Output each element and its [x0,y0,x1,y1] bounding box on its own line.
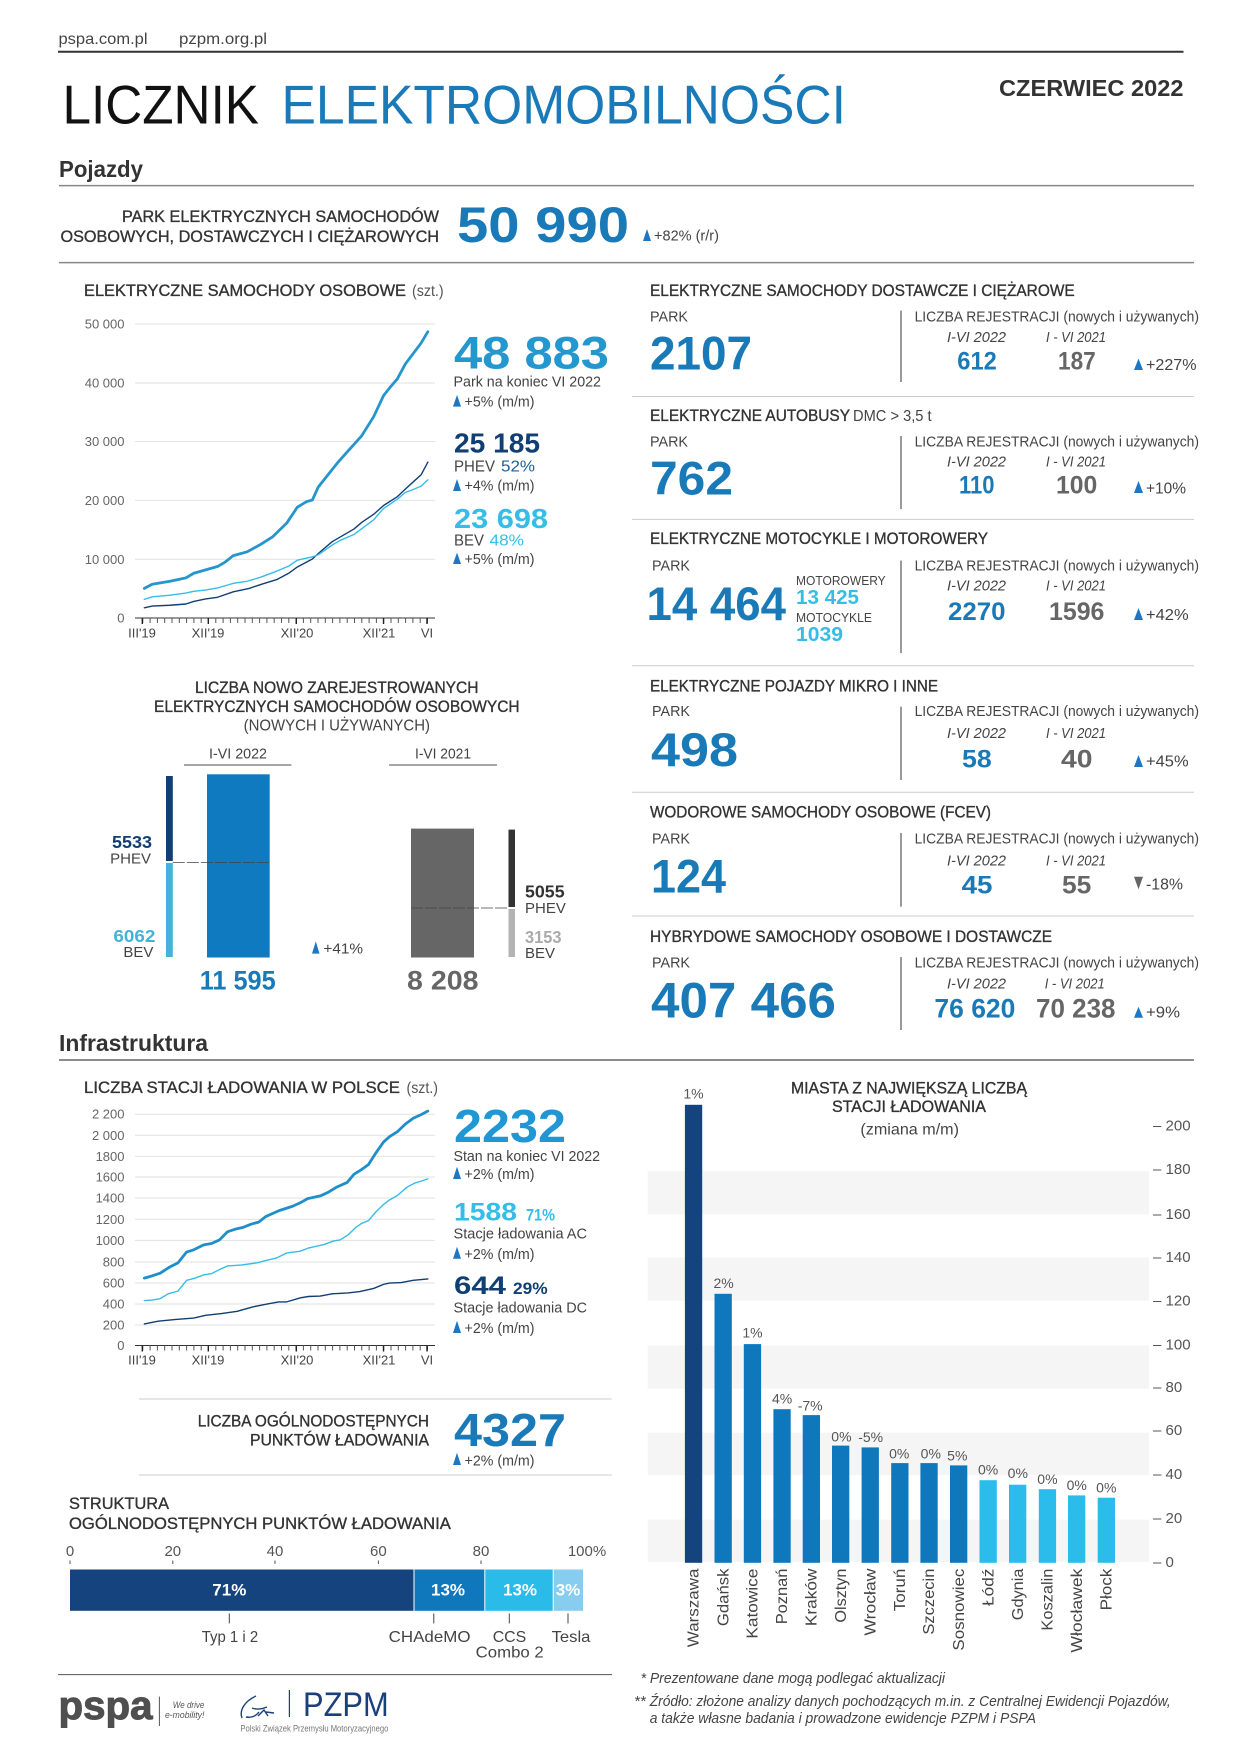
panel: hybrid cars: LICZBA REJESTRACJI (nowych i używanych) [915,954,1199,971]
bar group: I-VI 2021: 8 208 [407,965,478,995]
stacked bar: 60 [370,1543,387,1560]
title [62,73,846,135]
header links: pspa.com.pl [58,31,148,48]
panel: electric motorcycles and mopeds [646,529,1199,653]
stacked bar: Combo 2 [476,1644,544,1662]
total fleet headline: +82% (r/r) [654,228,719,245]
panel: hybrid cars [650,927,1199,1030]
line chart: stations: 1400 [96,1190,124,1206]
panel: charging points structure [66,1494,606,1662]
stacked bar: 71% [212,1581,246,1600]
total fleet headline: OSOBOWYCH, DOSTAWCZYCH I CIĘŻAROWYCH [60,227,439,246]
footnotes: a także własne badania i prowadzone ewidencje PZPM i PSPA [650,1710,1036,1727]
structure heading: STRUKTURA [69,1494,170,1513]
bar group: I-VI 2021: 5055 [525,882,565,902]
panel: vans and trucks: PARK [650,308,688,326]
bar chart: cities: – 180 [1153,1161,1191,1178]
panel: hybrid cars: PARK [652,954,690,971]
footnotes: * Prezentowane dane mogą podlegać aktualizacji [641,1670,946,1687]
line chart: stations: 2 200 [92,1107,124,1122]
stacked bar [66,1543,606,1662]
panel: micro vehicles: I-VI 2022 [947,725,1007,742]
panel: electric motorcycles and mopeds: 14 464 [646,577,786,630]
panel: electric buses: I-VI 2022 [947,453,1007,470]
line chart: stations: 400 [103,1296,124,1312]
panel: electric buses: PARK [650,434,688,450]
panel: electric buses: I - VI 2021 [1046,453,1106,470]
public charging points headline [198,1404,566,1469]
panel: micro vehicles: +45% [1146,754,1189,771]
stacked bar: 3% [556,1581,580,1600]
bar chart: cities: Toruń [892,1569,909,1611]
footnotes: Źródło: złożone analizy danych pochodzących m.in. z Centralnej Ewidencji Pojazdów, [649,1693,1171,1710]
bar chart: cities: Kraków [804,1568,820,1626]
bar chart: cities: 0% [978,1461,998,1477]
key figures: passenger cars: 25 185 [454,427,540,458]
line chart: stations: VI [421,1352,433,1367]
registrations heading: LICZBA NOWO ZAREJESTROWANYCH [195,678,478,697]
line chart: stations [92,1107,435,1367]
bar chart: cities: – 20 [1153,1510,1182,1527]
bar chart: cities: 0% [1067,1477,1087,1493]
stacked bar: 13% [431,1581,465,1600]
bar chart: cities: 0% [1008,1465,1028,1481]
registrations heading [154,678,520,735]
bar group: I-VI 2022: 5533 [112,832,152,852]
bar chart: cities: Łódź [980,1569,997,1606]
panel: hybrid cars: 407 466 [651,973,836,1029]
public charging points headline: +2% (m/m) [464,1452,534,1469]
bar chart: cities: – 200 [1153,1117,1191,1134]
bar chart: cities: – 120 [1153,1293,1191,1310]
chart heading: ELEKTRYCZNE SAMOCHODY OSOBOWE [84,281,406,300]
key figures: passenger cars: +5% (m/m) [464,394,534,411]
bar chart: cities: – 160 [1153,1206,1191,1223]
total fleet headline [60,197,719,253]
panel: electric motorcycles and mopeds: MOTOCYKLE [796,610,872,625]
panel: electric motorcycles and mopeds: +42% [1146,607,1189,624]
stacked bar: 20 [164,1543,181,1560]
panel: hydrogen cars: LICZBA REJESTRACJI (nowych i używanych) [915,830,1199,847]
line chart: stations: 200 [103,1318,124,1332]
bar chart: cities: 1% [683,1086,704,1102]
line chart: stations: XII'20 [281,1352,313,1367]
panel: hybrid cars: I - VI 2021 [1045,975,1105,992]
key figures: stations: 1588 [454,1199,517,1227]
panel: vans and trucks: 187 [1058,348,1096,376]
stacked bar: 0 [66,1543,74,1560]
key figures: stations: Stacje ładowania AC [454,1226,587,1243]
stacked bar: CHAdeMO [389,1629,470,1646]
bar chart: cities: 1% [742,1324,763,1340]
key figures: stations: +2% (m/m) [464,1166,534,1183]
panel: electric buses: LICZBA REJESTRACJI (nowych i używanych) [915,434,1199,450]
section heading: Pojazdy: Pojazdy [59,156,143,182]
cities heading: STACJI ŁADOWANIA [832,1097,987,1116]
panel: electric motorcycles and mopeds: 1039 [796,624,843,646]
bar chart: cities: Szczecin [921,1569,938,1635]
bar group: I-VI 2022 [110,746,291,995]
panel: electric buses: ELEKTRYCZNE AUTOBUSY [650,406,850,425]
panel: electric buses: 762 [650,452,733,504]
bar chart: cities: -7% [798,1398,823,1414]
date: CZERWIEC 2022 [999,75,1184,101]
cities heading [791,1079,1028,1138]
panel: electric motorcycles and mopeds: I - VI 2021 [1046,578,1106,594]
panel: hydrogen cars: -18% [1146,876,1183,893]
bar chart: cities: Koszalin [1040,1569,1057,1631]
line chart: passenger cars: 0 [117,610,124,626]
key figures: passenger cars: 52% [501,458,535,475]
cities heading: MIASTA Z NAJWIĘKSZĄ LICZBĄ [791,1079,1028,1098]
panel: hydrogen cars: PARK [652,830,690,847]
key figures: stations: +2% (m/m) [464,1320,534,1337]
panel: hydrogen cars: WODOROWE SAMOCHODY OSOBOWE (FCEV) [650,803,991,822]
bar chart: cities: Gdynia [1010,1569,1027,1620]
line chart: passenger cars: 10 000 [85,552,124,567]
panel: vans and trucks: I - VI 2021 [1046,329,1106,346]
bar group: I-VI 2021: BEV [525,945,555,962]
panel: micro vehicles: 40 [1061,745,1092,773]
bar chart: cities: 0% [921,1446,941,1462]
panel: hydrogen cars [650,803,1199,907]
panel: micro vehicles: 58 [962,745,992,773]
line chart: passenger cars: 40 000 [85,376,124,390]
panel: micro vehicles: PARK [652,703,690,720]
cities heading: (zmiana m/m) [860,1121,959,1138]
panel: charging stations line chart [84,1078,600,1367]
panel: vans and trucks: LICZBA REJESTRACJI (nowych i używanych) [915,308,1199,326]
key figures: stations: 29% [513,1279,548,1298]
logo: PSPA [58,1684,205,1728]
panel: electric buses: 100 [1056,471,1097,499]
logo: PZPM [240,1686,389,1734]
panel: electric buses: +10% [1146,480,1186,497]
key figures: stations [453,1100,600,1337]
panel: micro vehicles: I - VI 2021 [1046,725,1106,742]
bar chart: cities: Gdańsk [716,1568,733,1626]
panel: hydrogen cars: 124 [651,850,726,903]
panel: micro vehicles: LICZBA REJESTRACJI (nowych i używanych) [915,703,1199,720]
line chart: passenger cars: 50 000 [85,316,124,332]
panel: hybrid cars: I-VI 2022 [947,975,1007,992]
title: ELEKTROMOBILNOŚCI [282,73,846,135]
total fleet headline: 50 990 [457,197,629,253]
panel: vans and trucks: ELEKTRYCZNE SAMOCHODY DOSTAWCZE I CIĘŻAROWE [650,281,1075,300]
logo: PSPA: e-mobility! [165,1710,205,1720]
bar chart: cities: – 100 [1153,1337,1191,1354]
public charging points headline: 4327 [454,1404,566,1456]
line chart: passenger cars: XII'19 [192,626,224,641]
panel: passenger electric cars line chart [84,281,609,641]
panel: hydrogen cars: 55 [1062,871,1091,899]
bar group: I-VI 2022: BEV [123,944,153,961]
bar group: I-VI 2021: 3153 [525,927,562,947]
key figures: passenger cars: Park na koniec VI 2022 [454,373,601,390]
panel: vans and trucks: 612 [957,348,997,376]
key figures: passenger cars: +5% (m/m) [464,551,534,568]
stacked bar: 13% [503,1581,537,1600]
key figures: passenger cars: BEV [454,532,484,550]
bar group: I-VI 2021 [389,746,566,995]
line chart: stations: 1600 [96,1170,124,1184]
panel: electric buses: 110 [959,471,994,499]
bar chart: cities: Poznań [774,1569,791,1624]
panel: electric motorcycles and mopeds: I-VI 2022 [947,578,1007,594]
stacked bar: 80 [473,1543,489,1560]
line chart: stations: 600 [103,1276,124,1290]
bar chart: cities: -5% [858,1429,883,1445]
panel: hydrogen cars: I-VI 2022 [947,852,1007,869]
bar group: I-VI 2022: I-VI 2022 [209,746,267,763]
key figures: passenger cars: 48 883 [454,328,609,379]
chart heading: (szt.) [412,283,444,300]
bar group: I-VI 2022: 11 595 [200,965,276,995]
panel: electric buses: DMC > 3,5 t [853,408,932,425]
line chart: passenger cars: VI [421,626,433,641]
bar chart: cities: – 40 [1153,1466,1182,1483]
registrations heading: ELEKTRYCZNYCH SAMOCHODÓW OSOBOWYCH [154,697,520,716]
bar chart: cities: – 60 [1153,1422,1182,1439]
key figures: passenger cars [453,328,609,568]
key figures: passenger cars: 23 698 [454,503,548,534]
panel: hybrid cars: HYBRYDOWE SAMOCHODY OSOBOWE I DOSTAWCZE [650,927,1052,946]
bar chart: cities [648,1086,1191,1653]
total fleet headline: PARK ELEKTRYCZNYCH SAMOCHODÓW [122,207,439,226]
line chart: passenger cars [85,316,435,641]
panel: electric motorcycles and mopeds: 13 425 [796,587,859,609]
line chart: passenger cars: 20 000 [85,493,124,508]
line chart: stations: XII'21 [363,1352,395,1367]
stacked bar: CCS [493,1629,526,1646]
line chart: stations: 1200 [96,1212,124,1227]
panel: electric motorcycles and mopeds: PARK [652,557,690,574]
line chart: stations: 2 000 [92,1128,124,1143]
key figures: passenger cars: PHEV [454,458,495,475]
key figures: passenger cars: 48% [490,532,524,550]
panel: electric motorcycles and mopeds: ELEKTRYCZNE MOTOCYKLE I MOTOROWERY [650,529,988,548]
footnotes [634,1670,1171,1727]
bar chart: cities: – 140 [1153,1249,1191,1266]
panel: hybrid cars: 76 620 [934,994,1015,1024]
line chart: stations: XII'19 [192,1352,224,1367]
bar chart: cities: Płock [1098,1568,1116,1610]
bar chart: cities: 0% [1096,1479,1116,1495]
title: LICZNIK [62,73,259,135]
footnotes: ** [634,1693,647,1710]
panel: vans and trucks [650,281,1199,382]
bar chart: cities: – 0 [1153,1554,1174,1571]
bar group: I-VI 2022: PHEV [110,851,151,868]
bar group: I-VI 2021: PHEV [525,900,566,917]
key figures: stations: 644 [454,1272,506,1300]
key figures: stations: 71% [526,1206,555,1225]
line chart: passenger cars: III'19 [128,626,156,641]
bar chart: cities: Wrocław [862,1568,879,1636]
bar chart: cities: 4% [772,1390,792,1406]
bar chart: cities: Sosnowiec [951,1569,968,1651]
panel: cities bar chart [648,1079,1191,1653]
bar chart: cities: 2% [713,1275,734,1291]
bar chart: cities: – 80 [1153,1379,1182,1396]
bar chart: cities: Włocławek [1069,1568,1086,1653]
line chart: stations: III'19 [128,1352,156,1367]
bar chart: cities: Warszawa [686,1569,703,1647]
panel: electric motorcycles and mopeds: MOTOROWERY [796,573,886,588]
panel: vans and trucks: 2107 [650,326,752,380]
registrations heading: (NOWYCH I UŻYWANYCH) [244,716,430,735]
year-on-year change: +41% [323,941,363,958]
line chart: stations: 1000 [96,1233,124,1248]
panel: electric buses [650,406,1199,509]
key figures: stations: 2232 [454,1100,566,1152]
header links: pzpm.org.pl [179,31,267,48]
logo: PZPM: PZPM [303,1686,389,1724]
panel: micro vehicles: ELEKTRYCZNE POJAZDY MIKRO I INNE [650,677,938,696]
key figures: passenger cars: +4% (m/m) [464,478,534,495]
line chart: passenger cars: XII'21 [363,626,395,641]
panel: new registrations [110,678,566,995]
panel: electric motorcycles and mopeds: LICZBA REJESTRACJI (nowych i używanych) [915,557,1199,574]
panel: vans and trucks: +227% [1146,357,1196,374]
panel: hybrid cars: 70 238 [1036,994,1116,1024]
bar chart: cities: 0% [831,1429,852,1445]
bar chart: cities: 0% [889,1446,909,1462]
panel: hydrogen cars: I - VI 2021 [1046,852,1106,869]
bar group: I-VI 2022: 6062 [113,926,156,946]
stations heading: (szt.) [406,1080,438,1097]
line chart: stations: 800 [103,1254,124,1270]
bar chart: cities: Olsztyn [833,1569,850,1623]
logo: PZPM: Polski Związek Przemysłu Motoryzacyjnego [240,1724,388,1734]
logo: PSPA: pspa [58,1684,153,1728]
bar chart: cities: 0% [1037,1471,1058,1487]
line chart: stations: 0 [117,1338,124,1353]
public charging points headline: PUNKTÓW ŁADOWANIA [250,1431,430,1450]
line chart: passenger cars: 30 000 [85,434,124,449]
panel: micro vehicles: 498 [651,723,738,776]
key figures: stations: Stacje ładowania DC [454,1300,587,1317]
key figures: stations: Stan na koniec VI 2022 [454,1148,600,1165]
structure heading: OGÓLNODOSTĘPNYCH PUNKTÓW ŁADOWANIA [69,1514,451,1533]
logo: PSPA: We drive [173,1700,204,1710]
panel: hybrid cars: +9% [1146,1005,1180,1022]
stacked bar: Typ 1 i 2 [202,1629,258,1646]
header links [58,31,267,48]
public charging points headline: LICZBA OGÓLNODOSTĘPNYCH [198,1411,429,1430]
bar chart: cities: Katowice [745,1568,762,1639]
stacked bar: 40 [267,1543,283,1560]
stations heading: LICZBA STACJI ŁADOWANIA W POLSCE [84,1078,400,1097]
panel: vans and trucks: I-VI 2022 [947,329,1007,346]
section heading: Infrastruktura: Infrastruktura [59,1030,208,1056]
line chart: passenger cars: XII'20 [281,626,313,641]
panel: electric motorcycles and mopeds: 2270 [948,598,1006,626]
key figures: stations: +2% (m/m) [464,1246,534,1263]
stacked bar: 100% [568,1543,606,1560]
panel: hydrogen cars: 45 [962,871,993,899]
panel: micro vehicles [650,677,1199,780]
stacked bar: Tesla [552,1629,590,1646]
bar group: I-VI 2021: I-VI 2021 [415,746,471,763]
bar chart: cities: 5% [947,1447,967,1463]
panel: electric motorcycles and mopeds: 1596 [1049,598,1104,626]
line chart: stations: 1800 [96,1149,124,1164]
structure heading [69,1494,451,1533]
